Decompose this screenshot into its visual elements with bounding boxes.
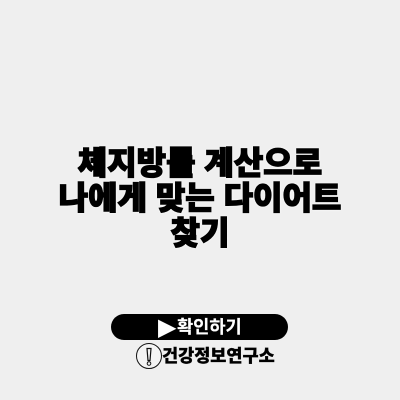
title: 체지방률 계산으로 <box>78 145 322 181</box>
icon: exclamation mark in circle <box>136 343 162 369</box>
button: confirm <box>111 314 288 340</box>
button: confirm: ▶ <box>158 313 176 341</box>
brand name: 건강정보연구소 <box>162 346 275 366</box>
title: 나에게 맞는 다이어트 <box>59 180 341 216</box>
button: confirm: 확인하기 <box>177 317 242 337</box>
title <box>59 145 341 251</box>
title: 찾기 <box>171 215 229 251</box>
